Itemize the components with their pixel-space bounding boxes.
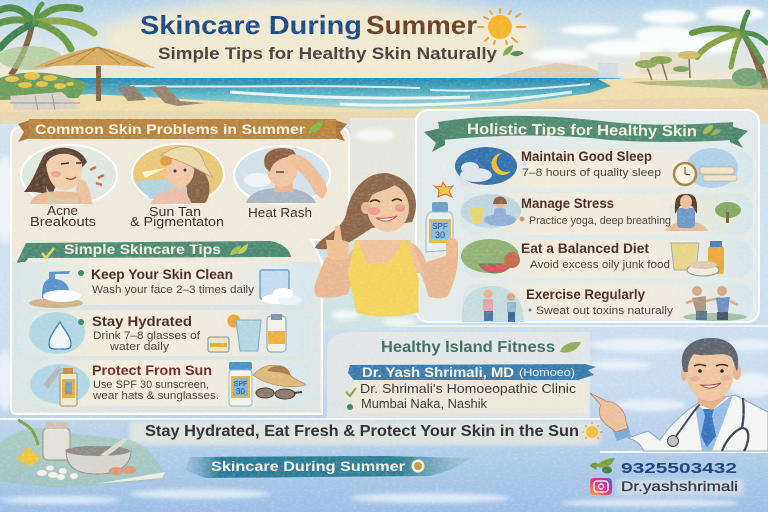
sunscreen bottle xyxy=(426,202,453,252)
illustration: acne breakouts xyxy=(21,145,117,205)
tip row: eat a balanced diet: Eat a Balanced Diet xyxy=(521,240,649,256)
doctor name band: Dr. Yash Shrimali, MD xyxy=(362,364,514,380)
tip row: protect from sun: Protect From Sun xyxy=(92,362,212,378)
banner: holistic tips: Holistic Tips for Healthy Skin xyxy=(467,121,697,140)
icon: yoga woman and tree xyxy=(664,194,741,231)
icon: SPF bottle xyxy=(229,362,252,406)
footer: tagline strip xyxy=(0,418,603,445)
contact: instagram handle: Dr.yashshrimali xyxy=(621,478,738,494)
tip row: eat a balanced diet xyxy=(461,239,753,278)
icon: SPF bottle: SPF xyxy=(234,381,247,388)
icon: jar, bowl and bottle xyxy=(671,241,724,276)
icon: glass, jar and bottle xyxy=(208,314,286,352)
chest xyxy=(347,240,424,273)
icon: two joggers xyxy=(683,286,747,321)
icon: sun hat and sunglasses xyxy=(253,365,306,399)
tip row: keep your skin clean xyxy=(16,262,312,308)
tip row: keep your skin clean: Keep Your Skin Clean xyxy=(91,266,233,282)
icon: sun xyxy=(478,9,525,44)
label: acne breakouts: Acne xyxy=(47,204,78,218)
star accent xyxy=(434,182,453,197)
panel: common skin problems and simple skincare tips xyxy=(11,127,349,414)
tank top xyxy=(348,240,419,316)
footer banner: skincare during summer: Skincare During Summer xyxy=(211,458,406,474)
hand xyxy=(590,393,628,432)
tip row: manage stress: Practice yoga, deep breathing xyxy=(529,215,671,227)
label: sun tan and pigmentation: Sun Tan xyxy=(149,205,201,219)
label: acne breakouts: Breakouts xyxy=(30,215,96,229)
tip row: maintain good sleep: 7–8 hours of quality sleep xyxy=(522,167,661,179)
panel: holistic tips xyxy=(416,110,759,322)
clinic address xyxy=(346,382,576,411)
contact: phone number: 9325503432 xyxy=(621,461,737,477)
lower mottled clouds xyxy=(0,155,768,507)
label: heat rash: Heat Rash xyxy=(248,206,312,220)
tip row: exercise regularly xyxy=(462,284,753,322)
clinic name: Healthy Island Fitness xyxy=(381,339,555,356)
icon: soap pump xyxy=(29,271,83,308)
tip row: stay hydrated: Drink 7–8 glasses of xyxy=(93,330,201,342)
beach umbrella xyxy=(33,47,155,101)
icon: towel and cotton xyxy=(260,270,302,305)
icon: moon and cloud xyxy=(455,147,517,185)
icon: fruit and vegetables xyxy=(461,239,520,273)
doctor pointing xyxy=(590,338,768,451)
icon: alarm clock and pillows xyxy=(674,148,738,188)
subtitle: Simple Tips for Healthy Skin Naturally xyxy=(158,44,498,63)
tip row: manage stress xyxy=(460,193,753,235)
icon: sunscreen tube xyxy=(30,364,90,406)
icon: SPF bottle: 30 xyxy=(236,387,245,396)
illustration: mortar, pills and herbs xyxy=(0,420,165,488)
icon: leaf xyxy=(560,342,581,353)
footer: tagline strip: Stay Hydrated, Eat Fresh & Protect Your Skin in the Sun xyxy=(145,423,579,440)
tip row: exercise regularly: Sweat out toxins naturally xyxy=(536,305,674,317)
footer banner: skincare during summer xyxy=(185,456,472,478)
doctor name band xyxy=(348,364,596,380)
contact: phone number xyxy=(590,458,737,477)
tip row: eat a balanced diet: Avoid excess oily junk food xyxy=(530,259,670,271)
illustration: sun tan xyxy=(132,144,224,204)
tip row: protect from sun xyxy=(26,360,310,406)
tip row: protect from sun: Use SPF 30 sunscreen, xyxy=(93,379,209,391)
tip row: protect from sun: wear hats & sunglasses. xyxy=(92,390,219,402)
banner: common skin problems xyxy=(18,119,347,142)
banner: simple skincare tips xyxy=(17,241,291,268)
title xyxy=(140,10,477,40)
icon: leaf sprig xyxy=(503,45,524,56)
coat xyxy=(628,395,768,451)
background behind woman xyxy=(323,118,418,330)
sunscreen bottle: 30 xyxy=(435,230,445,240)
title: Skincare During xyxy=(140,10,362,40)
neck and face xyxy=(698,388,726,410)
tip row: maintain good sleep xyxy=(455,147,753,188)
face xyxy=(367,184,409,232)
clinic address: Dr. Shrimali's Homoeopathic Clinic xyxy=(360,382,576,396)
tip row: maintain good sleep: Maintain Good Sleep xyxy=(521,148,652,164)
stethoscope xyxy=(722,398,748,451)
label: sun tan and pigmentation: & Pigmentaton xyxy=(130,215,224,229)
right palm trees xyxy=(630,12,768,90)
woman holding sunscreen xyxy=(314,173,458,316)
contact: instagram handle xyxy=(590,478,744,496)
tip row: stay hydrated: Stay Hydrated xyxy=(92,313,192,329)
lounge chairs xyxy=(117,86,205,106)
tip row: stay hydrated xyxy=(16,310,310,356)
left arm with thumbs up xyxy=(314,243,360,298)
illustration: heat rash xyxy=(234,146,330,204)
icon: meditating with drink xyxy=(461,194,521,228)
tip row: keep your skin clean: Wash your face 2–3 times daily xyxy=(92,284,255,296)
label: acne breakouts xyxy=(30,204,96,229)
clinic address: Mumbai Naka, Nashik xyxy=(361,397,488,411)
title: Summer xyxy=(366,10,477,40)
cuff xyxy=(613,425,631,441)
icon: two people walking xyxy=(462,286,524,322)
label: sun tan and pigmentation xyxy=(130,205,224,229)
doctor name band: (Homoeo) xyxy=(519,367,575,379)
shirt and tie xyxy=(695,395,733,451)
banner: simple skincare tips: Simple Skincare Tips xyxy=(64,241,221,257)
tip row: stay hydrated: water daily xyxy=(109,341,170,353)
tip row: exercise regularly: Exercise Regularly xyxy=(526,286,645,302)
hair xyxy=(315,173,416,249)
hand fingers xyxy=(446,238,458,260)
tip row: manage stress: Manage Stress xyxy=(521,195,614,211)
sunscreen bottle: SPF xyxy=(432,222,448,231)
right arm xyxy=(408,242,458,298)
panel: clinic information xyxy=(327,332,590,420)
left palm tree xyxy=(0,4,94,76)
banner: common skin problems: Common Skin Problems in Summer xyxy=(35,121,306,137)
banner: holistic tips xyxy=(424,116,748,152)
icon: water drop xyxy=(29,312,85,354)
flowering bushes and stones xyxy=(0,46,88,110)
